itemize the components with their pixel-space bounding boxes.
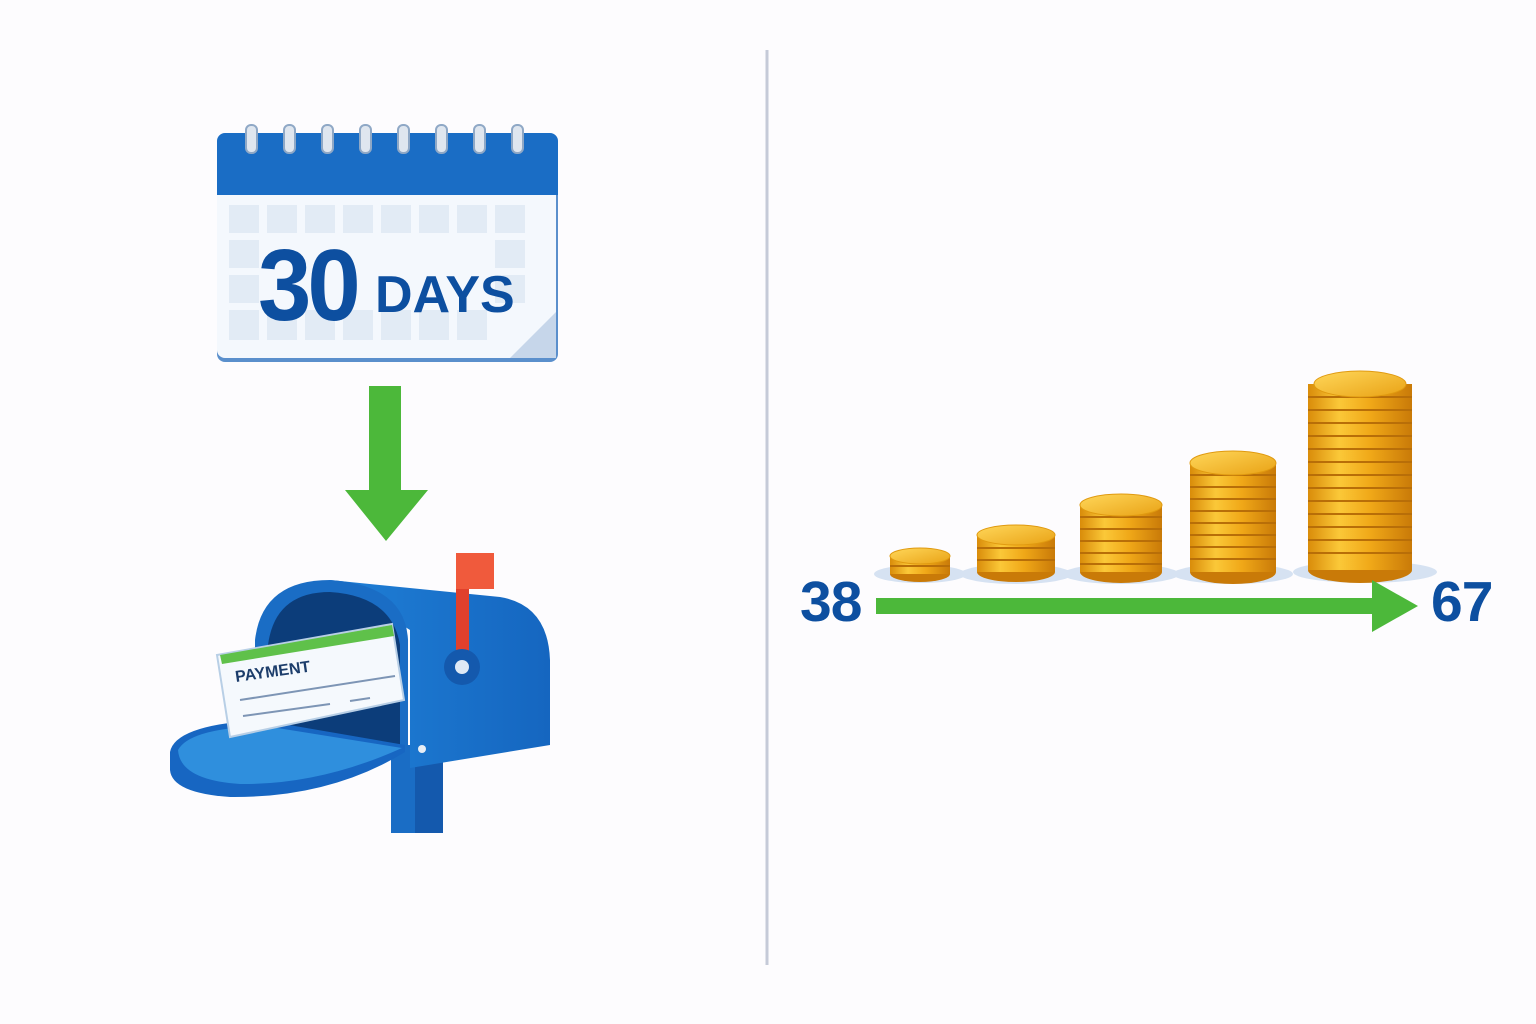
chart: growing coin stacks: [874, 371, 1437, 584]
label: 67: 67: [1431, 570, 1492, 634]
icon: mailbox with payment: PAYMENT: [234, 659, 312, 686]
coin stack 4: [1190, 451, 1276, 584]
coin stack 1: [890, 548, 950, 582]
coin stack 3: [1080, 494, 1162, 583]
coin stack 2: [977, 525, 1055, 582]
icon: calendar 30 days: [217, 125, 558, 362]
label: 38: 38: [800, 570, 861, 634]
coin stack 5: [1308, 371, 1412, 583]
arrow: down: [345, 386, 428, 541]
arrow: right: [876, 580, 1418, 632]
icon: mailbox with payment: [170, 553, 550, 833]
icon: calendar 30 days: 30: [258, 229, 357, 342]
icon: calendar 30 days: DAYS: [375, 266, 515, 324]
